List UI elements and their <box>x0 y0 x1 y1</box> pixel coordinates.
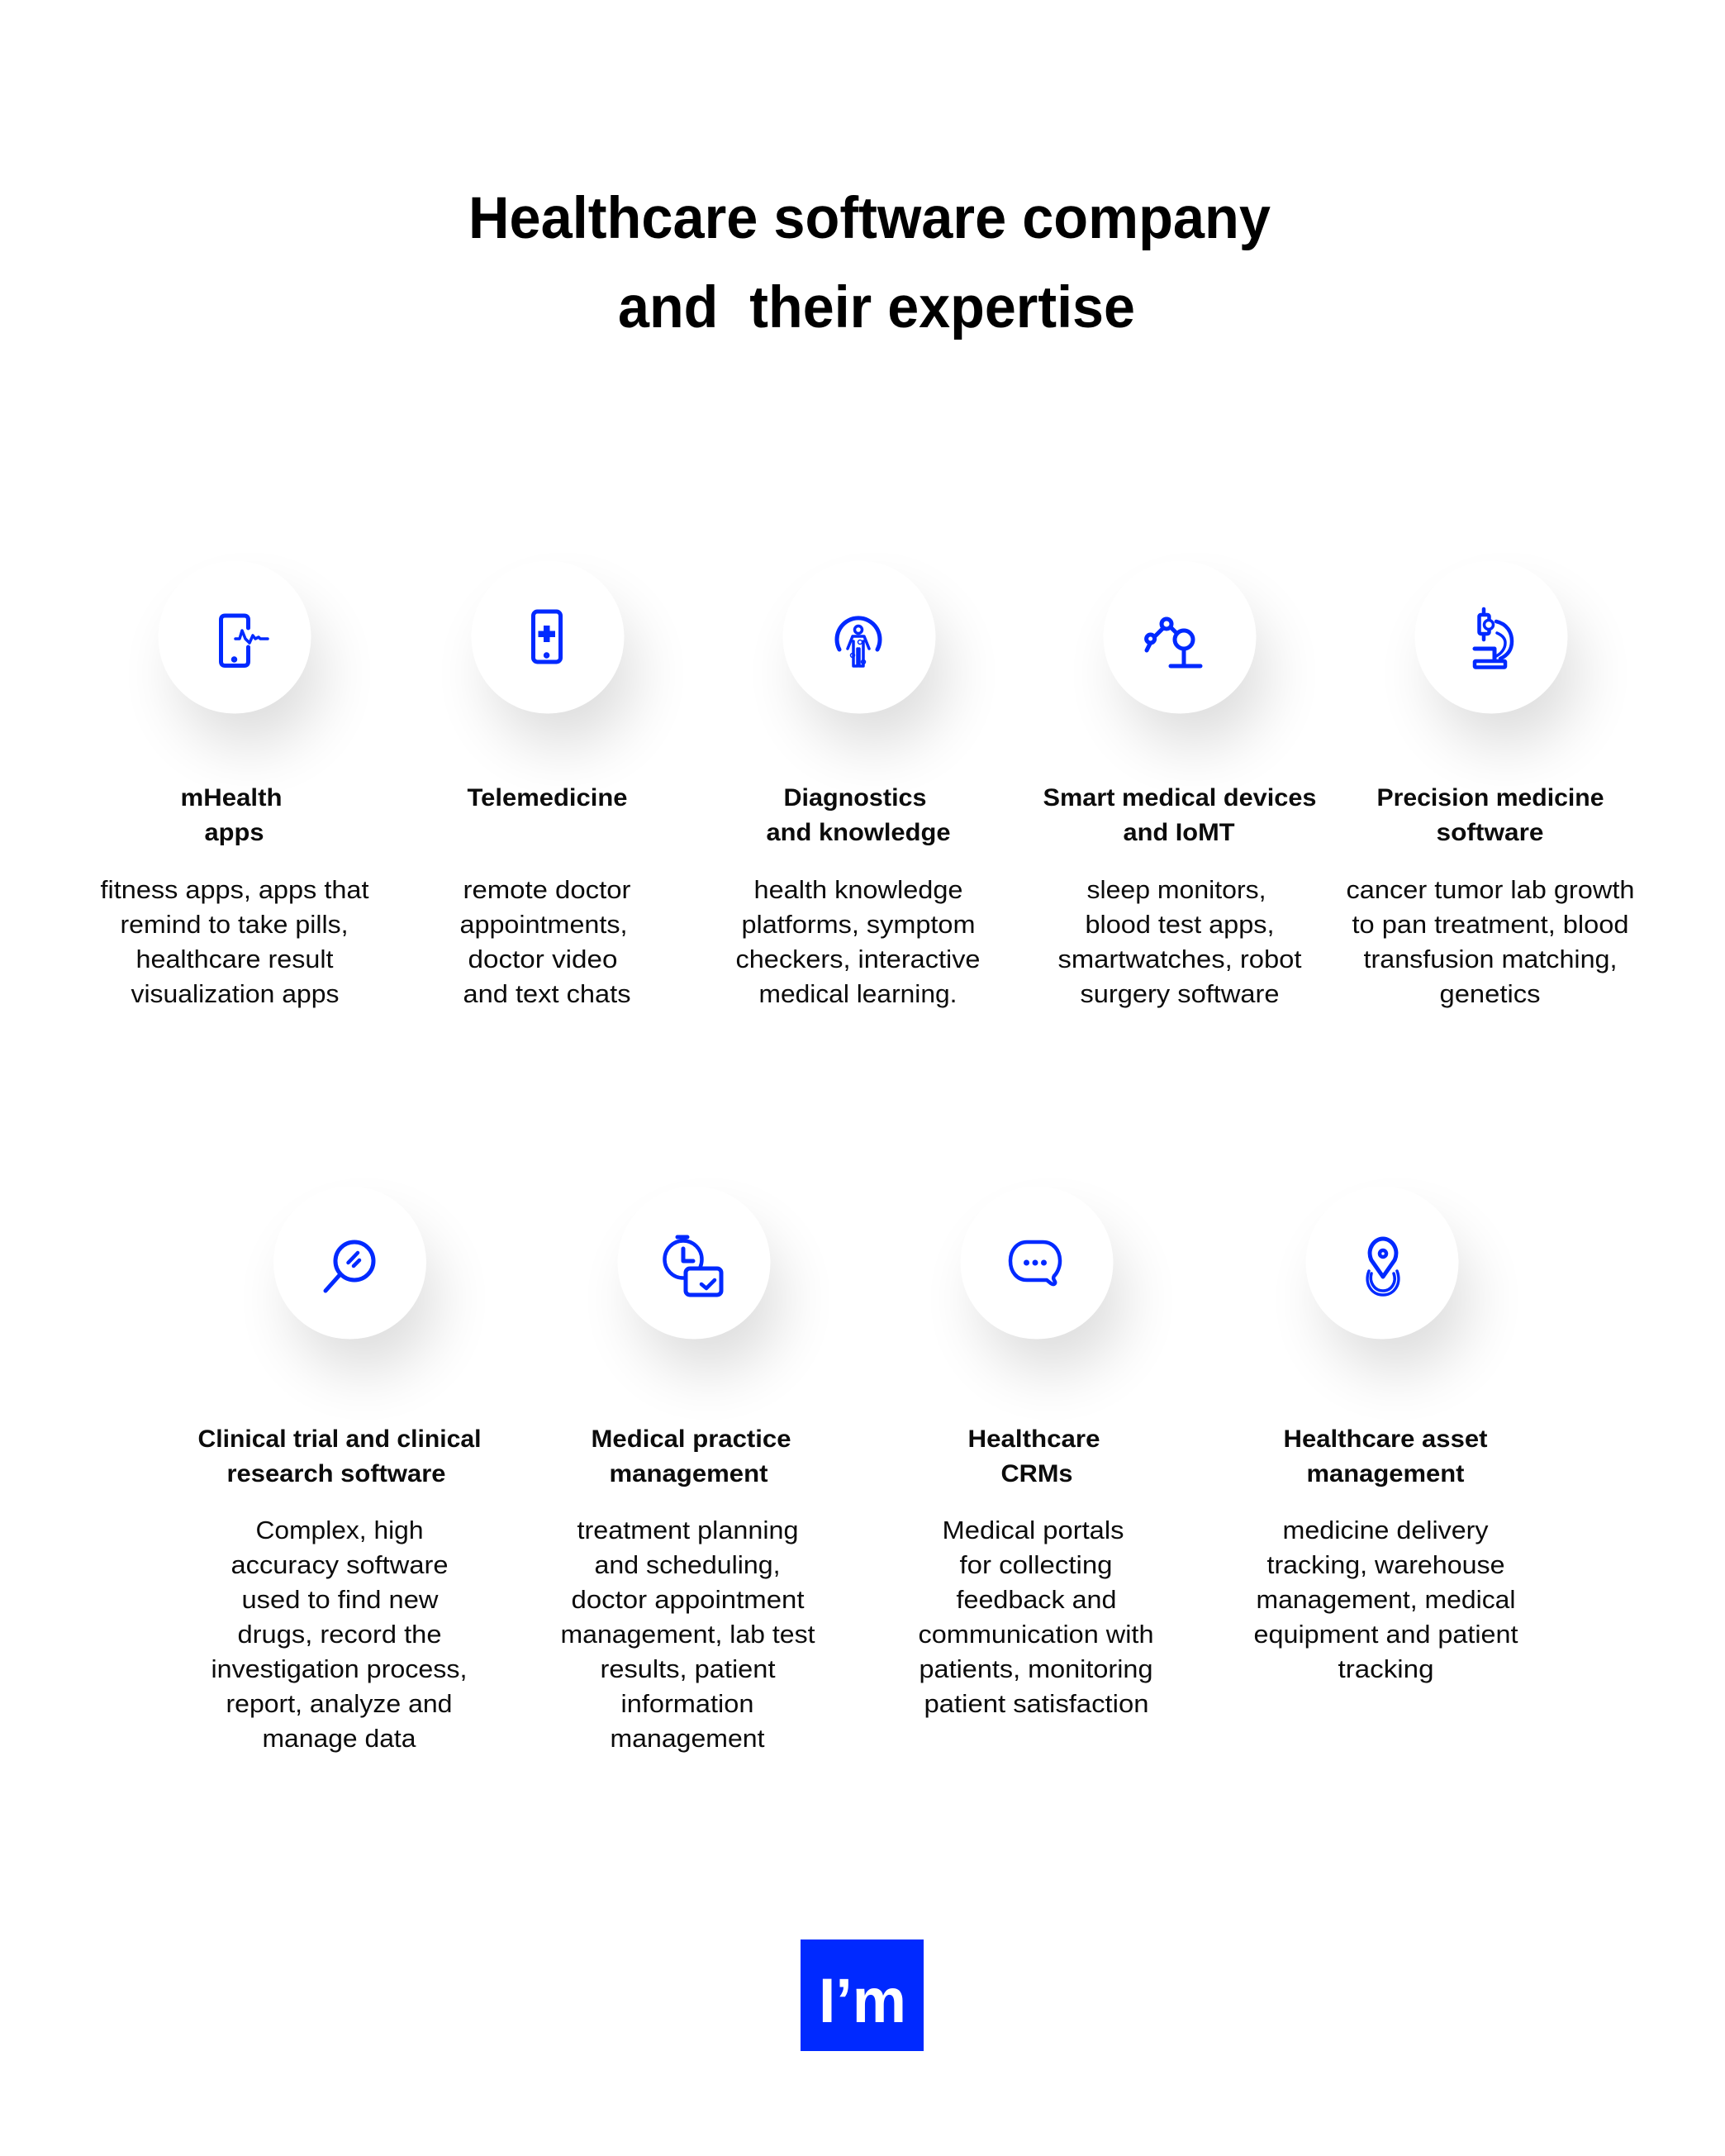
description: Medical practice management <box>560 1516 815 1753</box>
description: Diagnostics and knowledge: health knowledge <box>753 875 963 904</box>
card: Diagnostics and knowledge <box>735 560 980 1008</box>
description: Clinical trial and clinical research software: investigation process, <box>211 1654 468 1683</box>
description: Telemedicine: appointments, <box>459 910 628 939</box>
icon badge: Telemedicine <box>471 560 635 746</box>
description: mHealth apps: visualization apps <box>131 979 339 1008</box>
card: Telemedicine <box>459 560 635 1008</box>
icon: clock and checklist <box>664 1237 721 1295</box>
description: Healthcare CRMs: communication with <box>919 1620 1153 1649</box>
icon badge: Healthcare asset <box>1305 1187 1470 1372</box>
description: Smart medical devices and IoMT <box>1057 875 1302 1008</box>
card: Healthcare asset management <box>1254 1187 1518 1683</box>
description: Precision medicine software: genetics <box>1439 979 1540 1008</box>
icon badge: Precision medicine <box>1414 560 1579 746</box>
heading: Medical practice management: Medical practice <box>592 1425 791 1453</box>
title: and their expertise <box>618 275 1135 340</box>
card: Precision medicine software <box>1347 560 1634 1008</box>
description: Medical practice management: doctor appointment <box>572 1585 805 1614</box>
description: Healthcare CRMs: for collecting <box>960 1550 1112 1579</box>
description: Clinical trial and clinical research software: drugs, record the <box>238 1620 441 1649</box>
logo: I’m <box>819 1966 906 2036</box>
heading: Diagnostics and knowledge: Diagnostics <box>783 784 927 811</box>
description: Clinical trial and clinical research software: Complex, high <box>256 1516 423 1544</box>
description: Smart medical devices and IoMT: blood test apps, <box>1086 910 1274 939</box>
description: Healthcare CRMs: Medical portals <box>942 1516 1124 1544</box>
description: Precision medicine software: cancer tumor lab growth <box>1347 875 1634 904</box>
description: Clinical trial and clinical research software: report, analyze and <box>226 1689 453 1718</box>
description: Medical practice management: information <box>621 1689 753 1718</box>
description: Healthcare CRMs: patient satisfaction <box>924 1689 1148 1718</box>
description: Clinical trial and clinical research software: manage data <box>263 1724 416 1753</box>
description: mHealth apps: remind to take pills, <box>121 910 349 939</box>
description: Healthcare asset management: equipment and patient <box>1254 1620 1518 1649</box>
description: Smart medical devices and IoMT: smartwatches, robot <box>1057 945 1302 973</box>
description: Healthcare asset management: medicine delivery <box>1282 1516 1489 1544</box>
card: Clinical trial and clinical research software <box>198 1187 481 1753</box>
title <box>468 186 1271 340</box>
card: Smart medical devices and IoMT <box>1043 560 1317 1008</box>
heading: Clinical trial and clinical research software: Clinical trial and clinical <box>198 1425 481 1453</box>
description: mHealth apps: fitness apps, apps that <box>101 875 369 904</box>
heading: Healthcare CRMs <box>968 1425 1100 1487</box>
description: Clinical trial and clinical research software <box>211 1516 468 1753</box>
card: Medical practice management <box>560 1187 815 1753</box>
heading: Healthcare asset management: management <box>1307 1460 1465 1487</box>
heading: mHealth apps <box>180 784 283 846</box>
description: mHealth apps: healthcare result <box>135 945 334 973</box>
heading: Diagnostics and knowledge: and knowledge <box>767 819 950 846</box>
description: Healthcare CRMs <box>919 1516 1153 1718</box>
icon: microscope <box>1475 609 1512 668</box>
icon badge: Clinical trial <box>273 1187 437 1372</box>
heading: Diagnostics and knowledge <box>767 784 950 846</box>
heading: Healthcare asset management <box>1284 1425 1488 1487</box>
heading: Smart medical devices and IoMT: and IoMT <box>1124 819 1234 846</box>
heading: mHealth apps: apps <box>205 819 264 846</box>
description: Smart medical devices and IoMT: sleep monitors, <box>1087 875 1266 904</box>
heading: Medical practice management: management <box>610 1460 768 1487</box>
description: Medical practice management: management, lab test <box>560 1620 815 1649</box>
description: Diagnostics and knowledge <box>735 875 980 1008</box>
icon: chat bubble <box>1010 1242 1060 1284</box>
description: Clinical trial and clinical research software: accuracy software <box>231 1550 448 1579</box>
description: Healthcare asset management: tracking, warehouse <box>1267 1550 1505 1579</box>
logo <box>801 1939 924 2051</box>
description: Precision medicine software: to pan treatment, blood <box>1352 910 1629 939</box>
description: Telemedicine <box>459 875 631 1008</box>
description: Clinical trial and clinical research software: used to find new <box>241 1585 439 1614</box>
description: Healthcare CRMs: feedback and <box>957 1585 1117 1614</box>
heading: Precision medicine software: software <box>1436 819 1543 846</box>
heading: Healthcare CRMs: Healthcare <box>968 1425 1100 1453</box>
description: Medical practice management: and scheduling, <box>595 1550 780 1579</box>
heading: Precision medicine software: Precision medicine <box>1376 784 1604 811</box>
card: mHealth apps <box>101 560 369 1008</box>
description: Precision medicine software: transfusion matching, <box>1363 945 1618 973</box>
heading: Smart medical devices and IoMT <box>1043 784 1317 846</box>
description: Healthcare asset management <box>1254 1516 1518 1683</box>
icon: magnifying glass <box>326 1242 373 1291</box>
heading: Healthcare CRMs: CRMs <box>1001 1460 1072 1487</box>
heading: Precision medicine software <box>1376 784 1604 846</box>
description: Medical practice management: results, patient <box>600 1654 776 1683</box>
heading: Telemedicine: Telemedicine <box>468 784 628 811</box>
heading: Smart medical devices and IoMT: Smart medical devices <box>1043 784 1317 811</box>
card: Healthcare CRMs <box>919 1187 1153 1718</box>
heading: mHealth apps: mHealth <box>180 784 283 811</box>
description: Diagnostics and knowledge: medical learning. <box>758 979 957 1008</box>
description: Smart medical devices and IoMT: surgery software <box>1081 979 1279 1008</box>
description: Diagnostics and knowledge: platforms, symptom <box>742 910 975 939</box>
icon badge: Medical practice <box>618 1187 782 1372</box>
heading: Healthcare asset management: Healthcare asset <box>1284 1425 1488 1453</box>
icon badge: Diagnostics <box>783 560 947 746</box>
icon: robotic arm <box>1147 619 1200 666</box>
description: mHealth apps <box>101 875 369 1008</box>
icon: phone with medical cross <box>534 612 560 662</box>
heading: Clinical trial and clinical research software: research software <box>226 1460 446 1487</box>
heading: Medical practice management <box>592 1425 791 1487</box>
description: Healthcare asset management: management, medical <box>1256 1585 1515 1614</box>
description: Precision medicine software <box>1347 875 1634 1008</box>
icon badge: mHealth <box>159 560 322 746</box>
description: Healthcare CRMs: patients, monitoring <box>919 1654 1153 1683</box>
icon badge: Healthcare CRMs <box>960 1187 1124 1372</box>
description: Telemedicine: doctor video <box>468 945 618 973</box>
title: Healthcare software company <box>468 186 1271 251</box>
icon: body scan <box>837 618 880 666</box>
description: Medical practice management: management <box>610 1724 765 1753</box>
description: Diagnostics and knowledge: checkers, interactive <box>735 945 980 973</box>
icon: location pin <box>1367 1239 1399 1295</box>
description: Medical practice management: treatment planning <box>577 1516 798 1544</box>
description: Telemedicine: remote doctor <box>463 875 631 904</box>
heading: Clinical trial and clinical research software <box>198 1425 481 1487</box>
description: Healthcare asset management: tracking <box>1338 1654 1434 1683</box>
icon: phone with pulse <box>221 616 268 666</box>
icon badge: Smart devices <box>1104 560 1267 746</box>
description: Telemedicine: and text chats <box>463 979 631 1008</box>
